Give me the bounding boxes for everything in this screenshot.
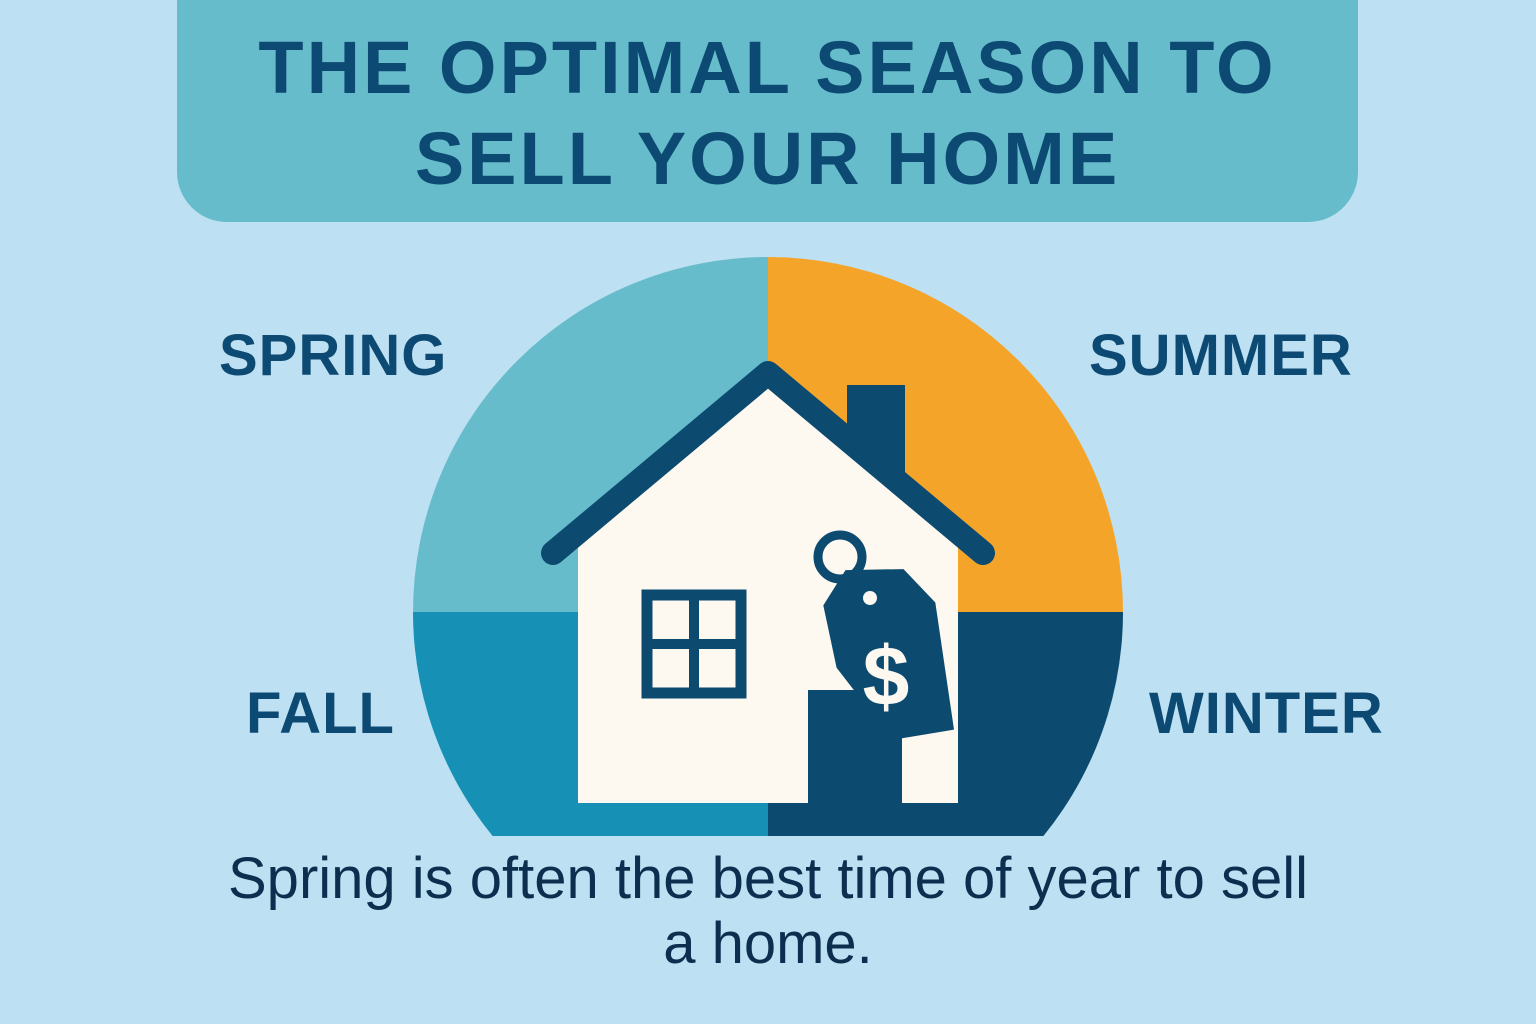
icon: house <box>553 373 983 803</box>
title <box>258 26 1277 200</box>
icon: price tag: $ <box>863 629 909 723</box>
label: spring: SPRING <box>219 323 447 388</box>
caption: a home. <box>663 911 873 976</box>
title: SELL YOUR HOME <box>415 117 1120 200</box>
season wheel with house <box>413 257 1123 836</box>
caption <box>228 846 1308 976</box>
caption: Spring is often the best time of year to sell <box>228 846 1308 911</box>
label: summer: SUMMER <box>1089 323 1353 388</box>
wheel quadrants <box>413 257 1123 836</box>
icon: price tag <box>818 535 954 743</box>
label: winter: WINTER <box>1149 681 1384 746</box>
banner <box>177 0 1358 222</box>
label: fall: FALL <box>246 681 395 746</box>
title: THE OPTIMAL SEASON TO <box>258 26 1277 109</box>
